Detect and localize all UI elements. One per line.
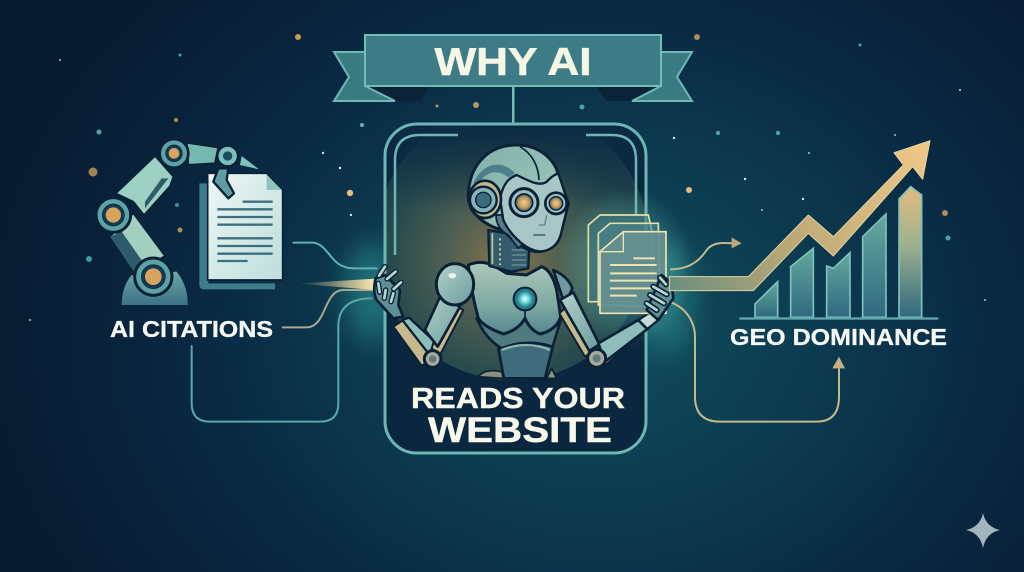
robot face	[500, 173, 568, 251]
joint middle	[96, 198, 131, 232]
inner corner brackets	[395, 135, 636, 255]
gripper claw	[213, 168, 234, 198]
chart baseline	[739, 317, 938, 320]
label: reads your: READS YOUR	[411, 383, 625, 415]
label: GEO dominance: GEO DOMINANCE	[730, 324, 947, 350]
chart bars	[755, 187, 922, 317]
arm lower segment	[110, 213, 165, 273]
robot hands	[374, 267, 673, 320]
robot lower chest	[477, 317, 562, 348]
arm base	[122, 272, 188, 305]
icon: sparkle	[966, 513, 1000, 548]
banner body	[365, 35, 661, 86]
documents held by robot	[588, 215, 666, 313]
robot head	[468, 145, 568, 272]
robot arm icon	[96, 139, 259, 305]
banner ribbon tails	[334, 52, 692, 101]
glow behind documents	[557, 188, 693, 348]
label: AI citations: AI CITATIONS	[110, 316, 273, 342]
gripper joint	[217, 146, 238, 166]
central frame	[375, 106, 649, 453]
robot body	[468, 262, 562, 378]
frame background	[385, 124, 646, 453]
banner shadow	[365, 86, 661, 101]
left hand	[374, 267, 403, 318]
joint lower	[135, 258, 172, 295]
arm top segment	[187, 143, 218, 165]
robot chest core	[514, 288, 536, 310]
growth chart	[669, 141, 938, 422]
document icon	[199, 168, 283, 289]
joint top	[160, 139, 188, 168]
growth arrow	[669, 141, 930, 291]
right hand	[647, 275, 673, 320]
robot neck	[488, 230, 529, 272]
frame label text	[411, 383, 625, 450]
robot right arm	[553, 270, 658, 367]
robot right eye	[545, 193, 567, 214]
banner title text: WHY AI	[434, 41, 592, 84]
document shadow	[199, 183, 275, 289]
banner stem	[512, 86, 514, 123]
robot ear	[469, 181, 501, 218]
arm upper segment	[116, 156, 173, 215]
robot left arm	[393, 264, 474, 367]
robot jaw panel	[496, 215, 523, 248]
outer frame border	[385, 124, 646, 453]
robot hips	[478, 368, 557, 378]
title banner	[334, 35, 692, 101]
robot chest	[468, 262, 561, 334]
small arrow from documents	[670, 237, 742, 269]
robot left eye	[510, 189, 538, 217]
inner glow	[386, 139, 644, 380]
document text lines	[217, 202, 273, 261]
robot helmet	[468, 145, 568, 252]
label: website: WEBSITE	[428, 411, 612, 450]
robot abdomen	[498, 343, 553, 378]
document page	[208, 173, 283, 280]
connector lines: left side	[192, 243, 377, 422]
side glows around frame	[346, 242, 693, 355]
lower arrow to label	[672, 303, 845, 422]
background stars	[29, 34, 986, 321]
